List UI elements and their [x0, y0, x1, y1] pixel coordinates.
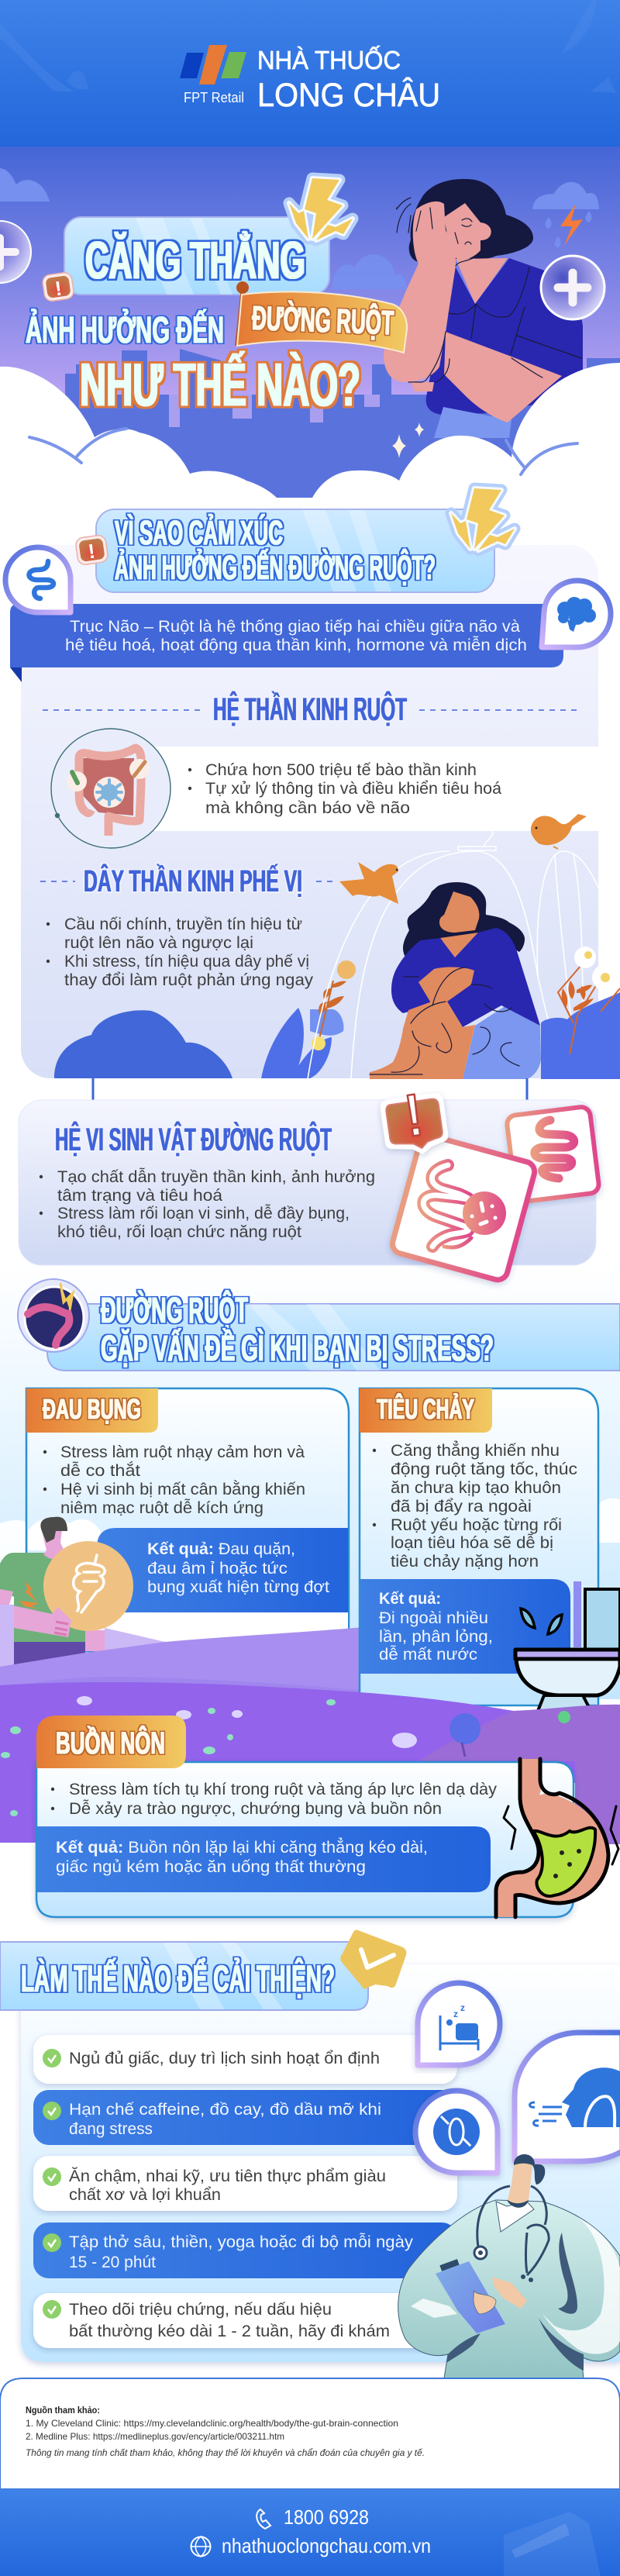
logo: FPT Retail — [180, 45, 246, 105]
text: enteric bullets: Tự xử lý thông tin và điều khiển tiêu hoá — [205, 780, 501, 798]
tip 1 — [33, 2035, 457, 2084]
card: nausea: giấc ngủ kém hoặc ăn uống thất thường — [56, 1858, 366, 1876]
woman holding head — [384, 179, 583, 438]
references panel: Nguồn tham khảo: — [26, 2405, 100, 2416]
toilet — [515, 1581, 620, 1715]
card: diarrhea: ăn chưa kịp tạo khuôn — [391, 1479, 561, 1497]
alert sticker — [42, 272, 74, 302]
title box — [64, 217, 329, 295]
logo wordmark: Nhà thuốc Long Châu: LONG CHÂU — [257, 77, 440, 114]
card: diarrhea: dễ mất nước — [379, 1646, 477, 1664]
icon: breathing — [515, 2033, 620, 2161]
references panel: Thông tin mang tính chất tham khảo, không thay thế lời khuyên và chẩn đoán của chuyên gia y tế. — [26, 2447, 425, 2458]
band: gut-brain axis — [10, 604, 563, 682]
card: abdominal pain: dễ co thắt — [60, 1462, 140, 1480]
panel: gut microbiome: khó tiêu, rối loạn chức năng ruột — [57, 1223, 301, 1241]
title line 2: ẢNH HƯỞNG ĐẾN — [26, 309, 224, 351]
card: abdominal pain: Kết quả: Đau quặn, — [147, 1540, 295, 1558]
card: diarrhea: Căng thẳng khiến nhu — [391, 1441, 560, 1460]
pink card large — [391, 1133, 537, 1282]
references panel: 2. Medline Plus: https://medlineplus.gov/ency/article/003211.htm — [26, 2431, 284, 2442]
card: diarrhea: loạn tiêu hóa sẽ dễ bị — [391, 1534, 553, 1552]
connectors — [93, 1078, 527, 1101]
footer band — [0, 2489, 620, 2576]
tip 5 — [33, 2293, 457, 2348]
card: nausea: BUỒN NÔN — [56, 1725, 165, 1760]
card: nausea: Dễ xảy ra trào ngược, chướng bụng và buồn nôn — [69, 1800, 442, 1818]
card: abdominal pain: ĐAU BỤNG — [43, 1393, 141, 1425]
contact: website: nhathuoclongchau.com.vn — [222, 2534, 431, 2557]
man with stomach ache — [0, 1517, 133, 1667]
card: diarrhea: động ruột tăng tốc, thúc — [391, 1460, 577, 1478]
card: abdominal pain: Hệ vi sinh bị mất cân bằng khiến — [60, 1481, 305, 1498]
section 2 title band — [47, 1290, 620, 1371]
card: diarrhea: TIÊU CHẢY — [377, 1392, 474, 1425]
section 3 panel — [21, 1964, 620, 2362]
card: abdominal pain: bụng xuất hiện từng đợt — [147, 1578, 329, 1596]
icon: sleep: z — [453, 2009, 458, 2019]
tip 3 — [33, 2156, 457, 2211]
icon: intestine pin — [5, 547, 71, 612]
card: diarrhea: Ruột yếu hoặc từng rối — [391, 1516, 562, 1534]
blue cloud — [54, 1010, 232, 1078]
text: vagus bullets: Khi stress, tín hiệu qua dây phế vị — [64, 953, 309, 971]
plants left — [261, 960, 356, 1078]
section 3 title band — [0, 1942, 368, 2010]
text: vagus bullets: Cầu nối chính, truyền tín hiệu từ — [64, 916, 302, 933]
tip 1: Ngủ đủ giấc, duy trì lịch sinh hoạt ổn định — [69, 2050, 380, 2067]
heading: enteric nervous system: HỆ THẦN KINH RUỘT — [213, 690, 407, 727]
logo: FPT Retail: FPT Retail — [184, 90, 244, 105]
tip 2: đang stress — [69, 2120, 153, 2138]
tip 4 — [33, 2223, 457, 2278]
tip 2 — [33, 2090, 457, 2145]
section 1 stickers — [75, 488, 515, 565]
tip 5: bất thường kéo dài 1 - 2 tuần, hãy đi khám — [69, 2323, 390, 2340]
card: nausea: Stress làm tích tụ khí trong ruột và tăng áp lực lên dạ dày — [69, 1781, 498, 1798]
band: gut-brain axis: hệ tiêu hoá, hoạt động qua thần kinh, hormone và miễn dịch — [65, 636, 527, 654]
lightning sticker — [289, 178, 353, 240]
panel: gut microbiome: Stress làm rối loạn vi sinh, dễ đầy bụng, — [57, 1205, 350, 1222]
text: enteric bullets: mà không cần báo về não — [205, 799, 410, 817]
contact: phone: 1800 6928 — [284, 2505, 369, 2529]
card: diarrhea: Đi ngoài nhiều — [379, 1609, 488, 1627]
title line 1: CĂNG THẲNG — [85, 230, 305, 290]
flying bird — [339, 862, 398, 904]
card: diarrhea: lần, phân lỏng, — [379, 1628, 493, 1646]
tip 5: Theo dõi triệu chứng, nếu dấu hiệu — [69, 2301, 332, 2319]
icon: stressed gut — [18, 1279, 89, 1352]
illustration: intestine circle — [51, 729, 170, 848]
card: diarrhea: Kết quả: — [379, 1590, 441, 1608]
tip 3: chất xơ và lợi khuẩn — [69, 2186, 221, 2204]
cage lines — [308, 831, 598, 1079]
section 3 title band: LÀM THẾ NÀO ĐỂ CẢI THIỆN? — [21, 1957, 335, 2000]
tip 4: Tập thở sâu, thiền, yoga hoặc đi bộ mỗi ngày — [69, 2233, 414, 2251]
hero clouds and sparkles — [0, 363, 620, 558]
alert sticker: ! — [53, 277, 64, 300]
references panel: 1. My Cleveland Clinic: https://my.clevelandclinic.org/health/body/the-gut-brain-connection — [26, 2418, 398, 2429]
icon: brain pin — [542, 581, 611, 647]
bird on cage — [531, 814, 587, 849]
card: abdominal pain: niêm mạc ruột dễ kích ứng — [60, 1499, 264, 1517]
card: diarrhea: tiêu chảy nặng hơn — [391, 1553, 539, 1571]
section 1 title box — [96, 509, 494, 592]
logo wordmark: Nhà thuốc Long Châu: NHÀ THUỐC — [257, 45, 401, 74]
bubble plus left — [0, 221, 31, 283]
section 2 title band: ĐƯỜNG RUỘT — [101, 1290, 248, 1330]
alert sticker — [379, 1091, 450, 1159]
card: abdominal pain: đau âm ỉ hoặc tức — [147, 1560, 288, 1578]
clouds in hero — [0, 168, 599, 289]
text: vagus bullets: ruột lên não và ngược lại — [64, 934, 253, 952]
title line 3: NHƯ THẾ NÀO? — [80, 350, 360, 419]
light hill — [0, 1605, 165, 1671]
band: gut-brain axis: Trục Não – Ruột là hệ thống giao tiếp hai chiều giữa não và — [70, 618, 520, 636]
panel: why emotions affect gut — [10, 545, 620, 1079]
woman in cage — [370, 882, 541, 1079]
flag: đường ruột — [236, 281, 407, 353]
text: vagus bullets — [46, 916, 314, 989]
bubble plus right — [541, 256, 604, 319]
card: nausea: Kết quả: Buồn nôn lặp lại khi căng thẳng kéo dài, — [56, 1838, 428, 1857]
tab — [26, 1388, 158, 1433]
panel: gut microbiome — [19, 1100, 596, 1265]
purple hills back — [0, 1627, 364, 1736]
card: abdominal pain: Stress làm ruột nhạy cảm hơn và — [60, 1443, 305, 1461]
header band — [0, 0, 620, 149]
hero background with skyline — [0, 147, 620, 503]
flag: đường ruột: ĐƯỜNG RUỘT — [251, 298, 394, 342]
icon: sleep: z — [460, 2002, 465, 2013]
doctor illustration — [398, 2154, 620, 2378]
icon: sleep — [418, 1983, 500, 2065]
panel: gut microbiome: tâm trạng và tiêu hoá — [57, 1187, 222, 1205]
text: enteric bullets: Chứa hơn 500 triệu tế bào thần kinh — [205, 761, 477, 779]
tip 4: 15 - 20 phút — [69, 2254, 156, 2271]
flowers and hills right — [541, 947, 620, 1079]
tip 3: Ăn chậm, nhai kỹ, ưu tiên thực phẩm giàu — [69, 2167, 386, 2185]
references panel — [0, 2378, 620, 2489]
card: abdominal pain — [26, 1388, 349, 1651]
stomach illustration — [496, 1759, 618, 1917]
section 1 stickers: ! — [87, 540, 97, 563]
card: nausea — [36, 1716, 574, 1917]
text: vagus bullets: thay đổi làm ruột phản ứng ngay — [64, 971, 314, 989]
card: diarrhea: đã bị đẩy ra ngoài — [391, 1498, 532, 1516]
panel: gut microbiome: HỆ VI SINH VẬT ĐƯỜNG RUỘT — [55, 1120, 332, 1157]
contact: phone — [257, 2505, 369, 2529]
purple hill front — [0, 1682, 620, 1844]
heading: vagus nerve: DÂY THẦN KINH PHẾ VỊ — [84, 863, 302, 898]
card: diarrhea — [360, 1388, 598, 1705]
text: enteric bullets — [188, 761, 501, 817]
section 1 title box: VÌ SAO CẢM XÚC — [115, 513, 283, 552]
page background section 2 — [0, 1265, 620, 1699]
check sticker — [340, 1930, 406, 1989]
icon: no coffee — [415, 2091, 498, 2173]
panel: gut microbiome: Tạo chất dẫn truyền thần kinh, ảnh hưởng — [57, 1168, 375, 1186]
pink card small — [506, 1106, 600, 1202]
tip 2: Hạn chế caffeine, đồ cay, đồ dầu mỡ khi — [69, 2101, 381, 2119]
logo wordmark: Nhà thuốc Long Châu — [257, 45, 440, 114]
